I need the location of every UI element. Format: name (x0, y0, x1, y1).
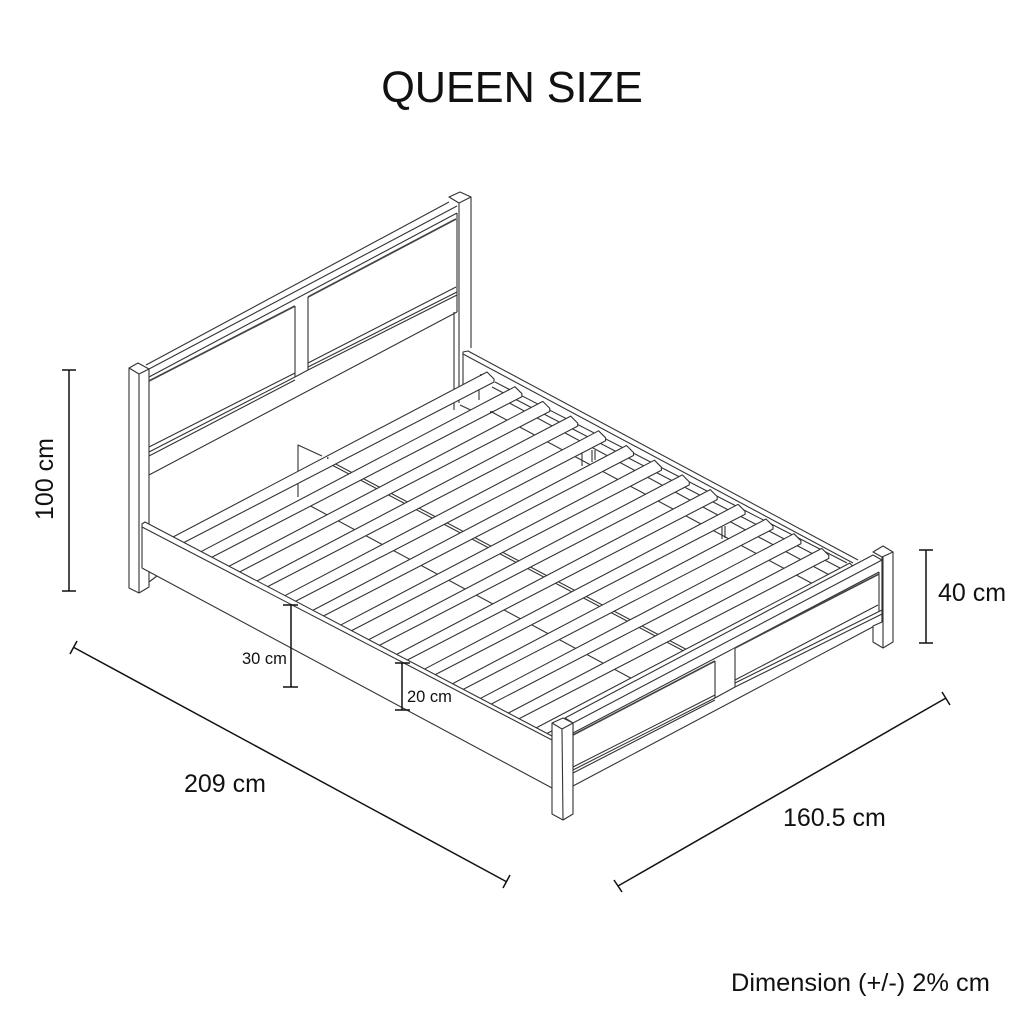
footboard lower rail (573, 605, 882, 773)
dimension: 209 cm length: 209 cm (184, 770, 266, 798)
dimension: 40 cm footboard height: 40 cm (938, 579, 1006, 607)
dimension: 20 cm under-bed clearance: 20 cm (407, 688, 452, 706)
headboard centre post (295, 297, 308, 377)
dimension: 100 cm headboard height (31, 370, 76, 591)
footboard (552, 546, 893, 820)
dimension: 20 cm under-bed clearance (395, 663, 452, 710)
footboard centre post (715, 648, 735, 698)
headboard top rail (146, 202, 457, 381)
dimension: 160.5 cm width (614, 692, 950, 892)
headboard lower rail (149, 287, 457, 475)
footnote: Dimension (+/-) 2% cm (731, 969, 990, 997)
right headboard post (449, 192, 471, 410)
slat screw marks (327, 375, 493, 458)
dimension: 209 cm length (70, 641, 510, 888)
bed illustration (129, 192, 893, 820)
right foot post (873, 546, 893, 648)
rear centre support (298, 445, 322, 497)
footboard panel (565, 555, 882, 786)
dimension: 30 cm rail clearance: 30 cm (242, 650, 287, 668)
dimension: 30 cm rail clearance (242, 605, 298, 687)
near side rail (142, 522, 552, 788)
dimension: 160.5 cm width: 160.5 cm (783, 804, 886, 832)
left headboard post (129, 363, 157, 593)
headboard (129, 192, 471, 593)
slat support ledges (305, 382, 847, 683)
dimension: 100 cm headboard height: 100 cm (31, 438, 59, 520)
bed slats (173, 372, 857, 734)
dimension: 40 cm footboard height (919, 550, 1006, 643)
title: QUEEN SIZE (381, 64, 643, 112)
left foot post (552, 718, 573, 820)
far side rail (463, 351, 858, 563)
